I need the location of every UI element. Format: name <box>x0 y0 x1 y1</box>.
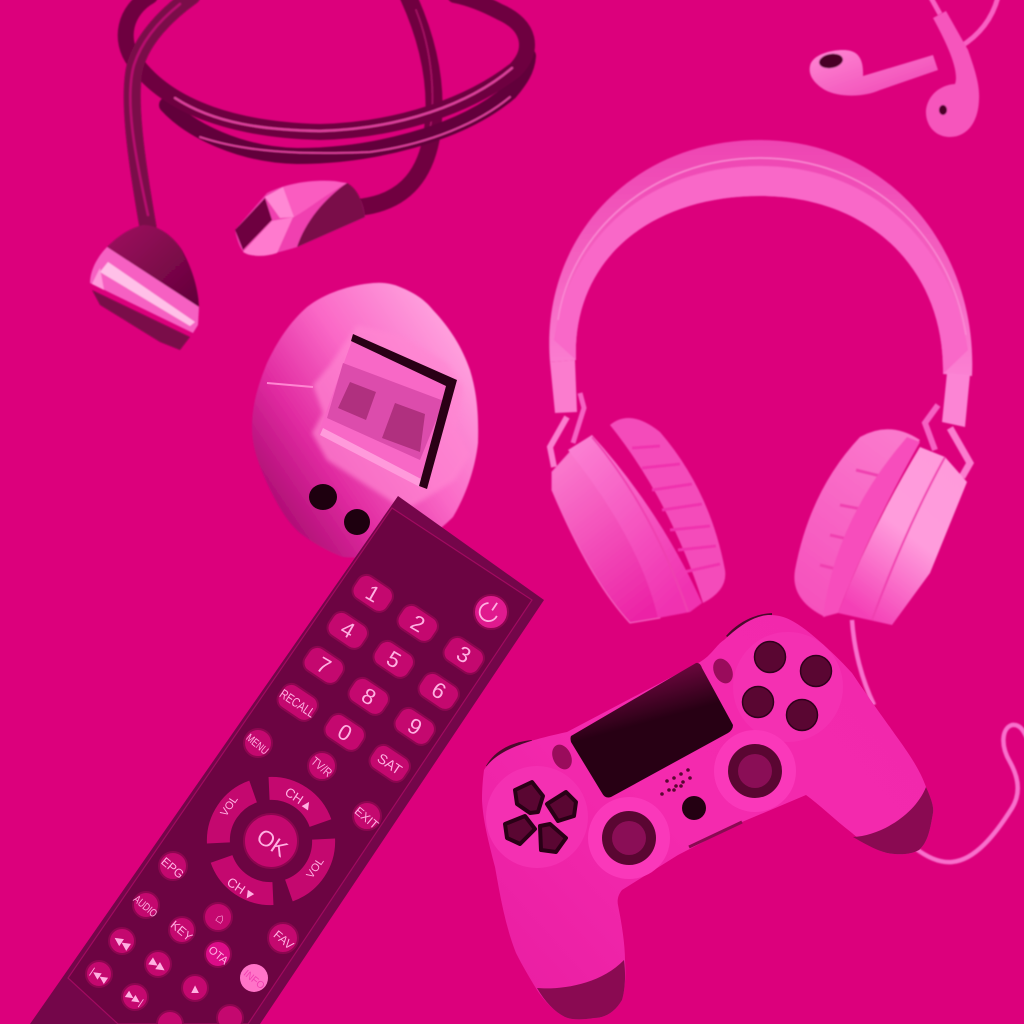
power icon <box>476 597 503 625</box>
remote labels: ▶▶ <box>147 956 168 976</box>
remote labels: 5 <box>382 646 405 673</box>
remote labels: ▲ <box>189 981 201 996</box>
bumpers <box>486 740 532 772</box>
remote labels: 9 <box>403 713 426 740</box>
remote labels: CH▼ <box>224 874 259 904</box>
remote labels: 7 <box>312 652 335 679</box>
remote labels: CH▲ <box>282 784 317 814</box>
left slider and hinge <box>550 360 584 467</box>
remote labels: AUDIO <box>130 893 159 920</box>
egg shell panel <box>312 325 470 510</box>
left grip end <box>537 960 625 1019</box>
icon: SCART plug <box>90 225 199 350</box>
speaker grille <box>660 768 692 796</box>
remote labels: 0 <box>333 719 356 746</box>
remote labels: |◀◀ <box>88 966 109 986</box>
d-pad area <box>486 766 588 868</box>
button pad <box>733 632 843 742</box>
remote labels: 2 <box>406 610 429 637</box>
remote labels: OK <box>252 824 293 862</box>
remote labels: FAV <box>271 928 296 952</box>
remote labels: EXIT <box>352 804 382 832</box>
right slider and hinge <box>925 373 970 477</box>
face buttons <box>742 642 832 730</box>
remote labels: INFO <box>241 968 266 992</box>
icon: coiled cable with plugs <box>90 0 528 350</box>
right ear cushion <box>794 429 967 625</box>
remote labels: EPG <box>158 854 187 881</box>
icon: headphones <box>549 140 1024 862</box>
egg buttons <box>309 484 337 510</box>
remote labels: OTA <box>206 944 231 968</box>
icon: network plug <box>235 181 365 256</box>
remote labels: MENU <box>243 732 270 758</box>
left ear cushion <box>552 418 725 623</box>
remote labels <box>88 580 475 1009</box>
headphone cable <box>852 620 1024 862</box>
d-pad keys <box>505 782 576 852</box>
screen <box>318 338 449 485</box>
icon: earbuds <box>810 0 998 137</box>
remote control <box>30 496 544 1024</box>
directional arc buttons <box>198 768 344 914</box>
right grip end <box>853 787 933 854</box>
icon: virtual pet egg <box>252 283 478 557</box>
touchpad <box>570 663 733 798</box>
remote labels: 4 <box>336 616 359 643</box>
icon: game controller <box>482 613 933 1019</box>
headband <box>549 140 972 376</box>
remote labels: 6 <box>427 677 450 704</box>
remote labels: 1 <box>361 580 384 607</box>
remote labels: VOL <box>304 856 327 881</box>
remote labels: VOL <box>218 794 241 819</box>
remote labels: ◀◀ <box>111 933 132 953</box>
remote labels: ▶▶| <box>124 989 145 1009</box>
remote buttons <box>86 571 508 1024</box>
remote labels: RECALL <box>277 687 318 721</box>
sticks <box>588 797 670 879</box>
remote labels: 3 <box>452 641 475 668</box>
remote labels: TV/R <box>308 755 334 780</box>
remote labels: 8 <box>357 683 380 710</box>
remote labels: ⌂ <box>213 909 229 927</box>
remote labels: KEY <box>168 918 195 944</box>
remote labels: SAT <box>374 750 405 778</box>
small buttons <box>682 796 706 820</box>
